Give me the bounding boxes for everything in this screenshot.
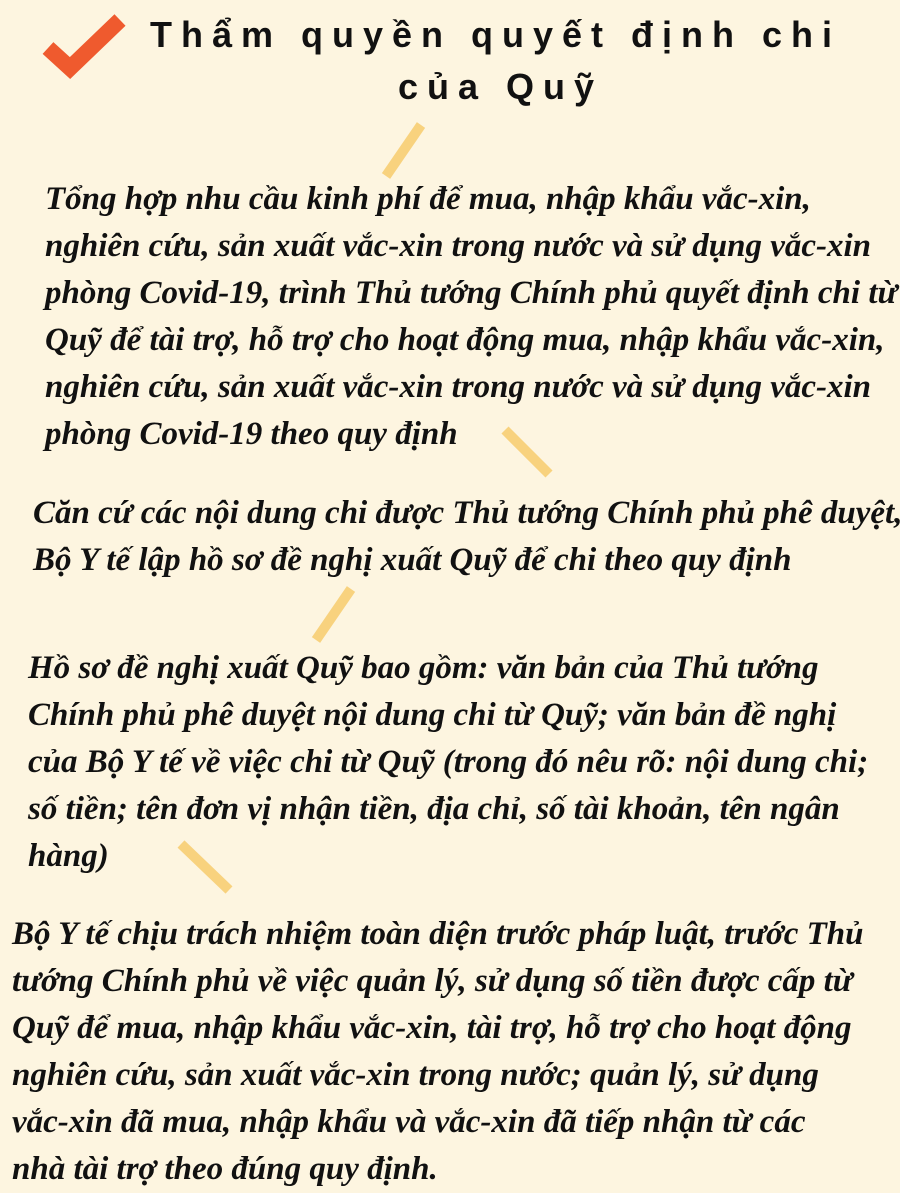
text block: step 4: nghiên cứu, sản xuất vắc-xin trong nước; quản lý, sử dụng (12, 1057, 819, 1093)
text block: step 4: Bộ Y tế chịu trách nhiệm toàn diện trước pháp luật, trước Thủ (12, 916, 864, 952)
text block: step 3: của Bộ Y tế về việc chi từ Quỹ (trong đó nêu rõ: nội dung chi; (28, 744, 868, 780)
text block: step 2 (32, 495, 900, 578)
text block: step 2: Căn cứ các nội dung chi được Thủ tướng Chính phủ phê duyệt, (33, 495, 900, 531)
title: Thẩm quyền quyết định chi (150, 14, 841, 55)
text block: step 4 (12, 916, 864, 1187)
text block: step 3 (28, 650, 868, 874)
title: của Quỹ (398, 66, 603, 107)
text block: step 4: tướng Chính phủ về việc quản lý, sử dụng số tiền được cấp từ (12, 963, 853, 999)
text block: step 3: số tiền; tên đơn vị nhận tiền, địa chỉ, số tài khoản, tên ngân (28, 791, 840, 827)
text block: step 1: nghiên cứu, sản xuất vắc-xin trong nước và sử dụng vắc-xin (45, 369, 871, 405)
text block: step 3: Chính phủ phê duyệt nội dung chi từ Quỹ; văn bản đề nghị (28, 697, 836, 733)
text block: step 1: nghiên cứu, sản xuất vắc-xin trong nước và sử dụng vắc-xin (45, 228, 871, 264)
text block: step 1: Quỹ để tài trợ, hỗ trợ cho hoạt động mua, nhập khẩu vắc-xin, (45, 322, 884, 358)
text block: step 3: Hồ sơ đề nghị xuất Quỹ bao gồm: văn bản của Thủ tướng (28, 650, 818, 686)
text block: step 4: Quỹ để mua, nhập khẩu vắc-xin, tài trợ, hỗ trợ cho hoạt động (12, 1010, 851, 1046)
text block: step 1 (42, 181, 900, 452)
text block: step 2: Bộ Y tế lập hồ sơ đề nghị xuất Quỹ để chi theo quy định (33, 542, 791, 578)
text block: step 4: nhà tài trợ theo đúng quy định. (12, 1151, 438, 1187)
text block: step 1: phòng Covid-19 theo quy định (45, 416, 458, 452)
text block: step 3: hàng) (28, 838, 109, 874)
title (150, 14, 841, 107)
text block: step 1: Tổng hợp nhu cầu kinh phí để mua, nhập khẩu vắc-xin, (45, 181, 811, 217)
text block: step 4: vắc-xin đã mua, nhập khẩu và vắc-xin đã tiếp nhận từ các (12, 1104, 805, 1140)
text block: step 1: phòng Covid-19, trình Thủ tướng Chính phủ quyết định chi từ (45, 275, 897, 311)
icon: checkmark (42, 14, 126, 79)
